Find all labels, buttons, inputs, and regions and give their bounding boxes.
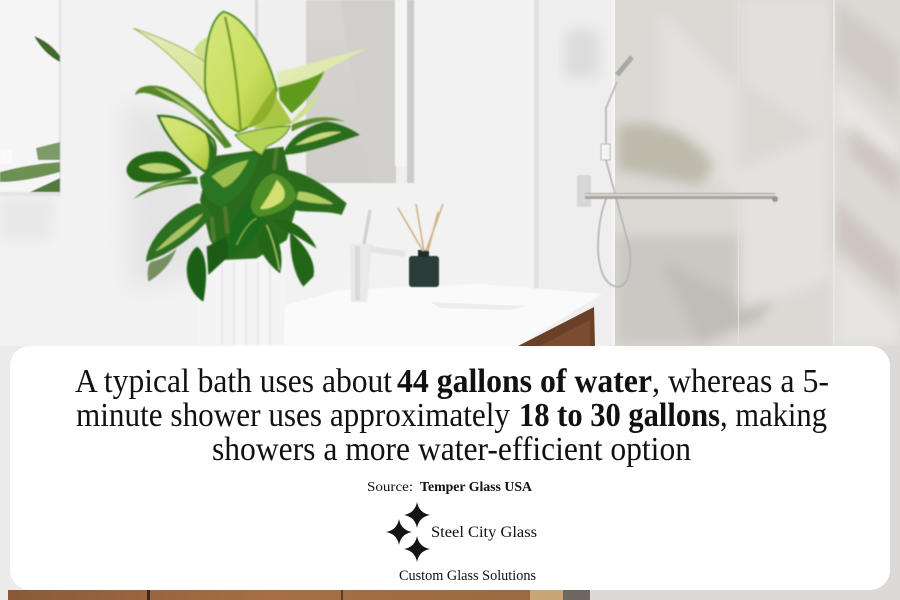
long lower left leaf: [148, 248, 177, 282]
source line: [367, 480, 533, 495]
towel bar: [577, 175, 778, 207]
centre dark leaf: [200, 154, 258, 207]
brand name: Steel City Glass: [431, 524, 537, 541]
right leaves: [292, 117, 345, 132]
right lower leaf: [277, 170, 347, 215]
statistic headline: 18 to 30 gallons: [519, 397, 720, 434]
tagline: Custom Glass Solutions: [399, 568, 536, 584]
glass door panel: [540, 0, 615, 345]
info card: [10, 346, 890, 590]
shower tile wall: [614, 0, 900, 600]
plant pot: [196, 258, 286, 345]
icon: logo stars: [386, 502, 430, 562]
wall shadow behind plant: [125, 100, 215, 290]
faucet: [350, 210, 405, 302]
countertop: [230, 284, 602, 346]
source line: Temper Glass USA: [420, 480, 533, 495]
left pale leaf: [158, 116, 216, 172]
wooden floor strip: [8, 590, 900, 600]
left mirror: [0, 0, 61, 196]
reed diffuser: [398, 204, 443, 287]
lower dark leaf: [227, 200, 267, 257]
shower head and hose: [598, 57, 632, 287]
statistic headline: minute shower uses approximately: [76, 397, 510, 434]
statistic headline: , making: [720, 397, 827, 434]
statistic headline: A typical bath uses about: [75, 363, 393, 400]
statistic headline: showers a more water-efficient option: [212, 431, 691, 468]
lower margins: [0, 346, 450, 600]
big top leaf: [205, 12, 277, 132]
centre pale triangular leaf: [235, 126, 290, 155]
vanity cabinet: [518, 307, 595, 346]
source line: Source:: [367, 480, 413, 495]
dense foliage backing: [200, 147, 297, 260]
statistic headline: , whereas a 5-: [652, 363, 829, 400]
dark left leaf: [127, 151, 192, 182]
statistic headline: 44 gallons of water: [397, 363, 652, 400]
centre mirror: [255, 0, 416, 185]
stems: [210, 120, 277, 242]
houseplant: [127, 12, 368, 302]
statistic headline: [75, 363, 829, 468]
drooping leaves: [207, 237, 228, 275]
yellow-centre leaf: [250, 173, 297, 217]
